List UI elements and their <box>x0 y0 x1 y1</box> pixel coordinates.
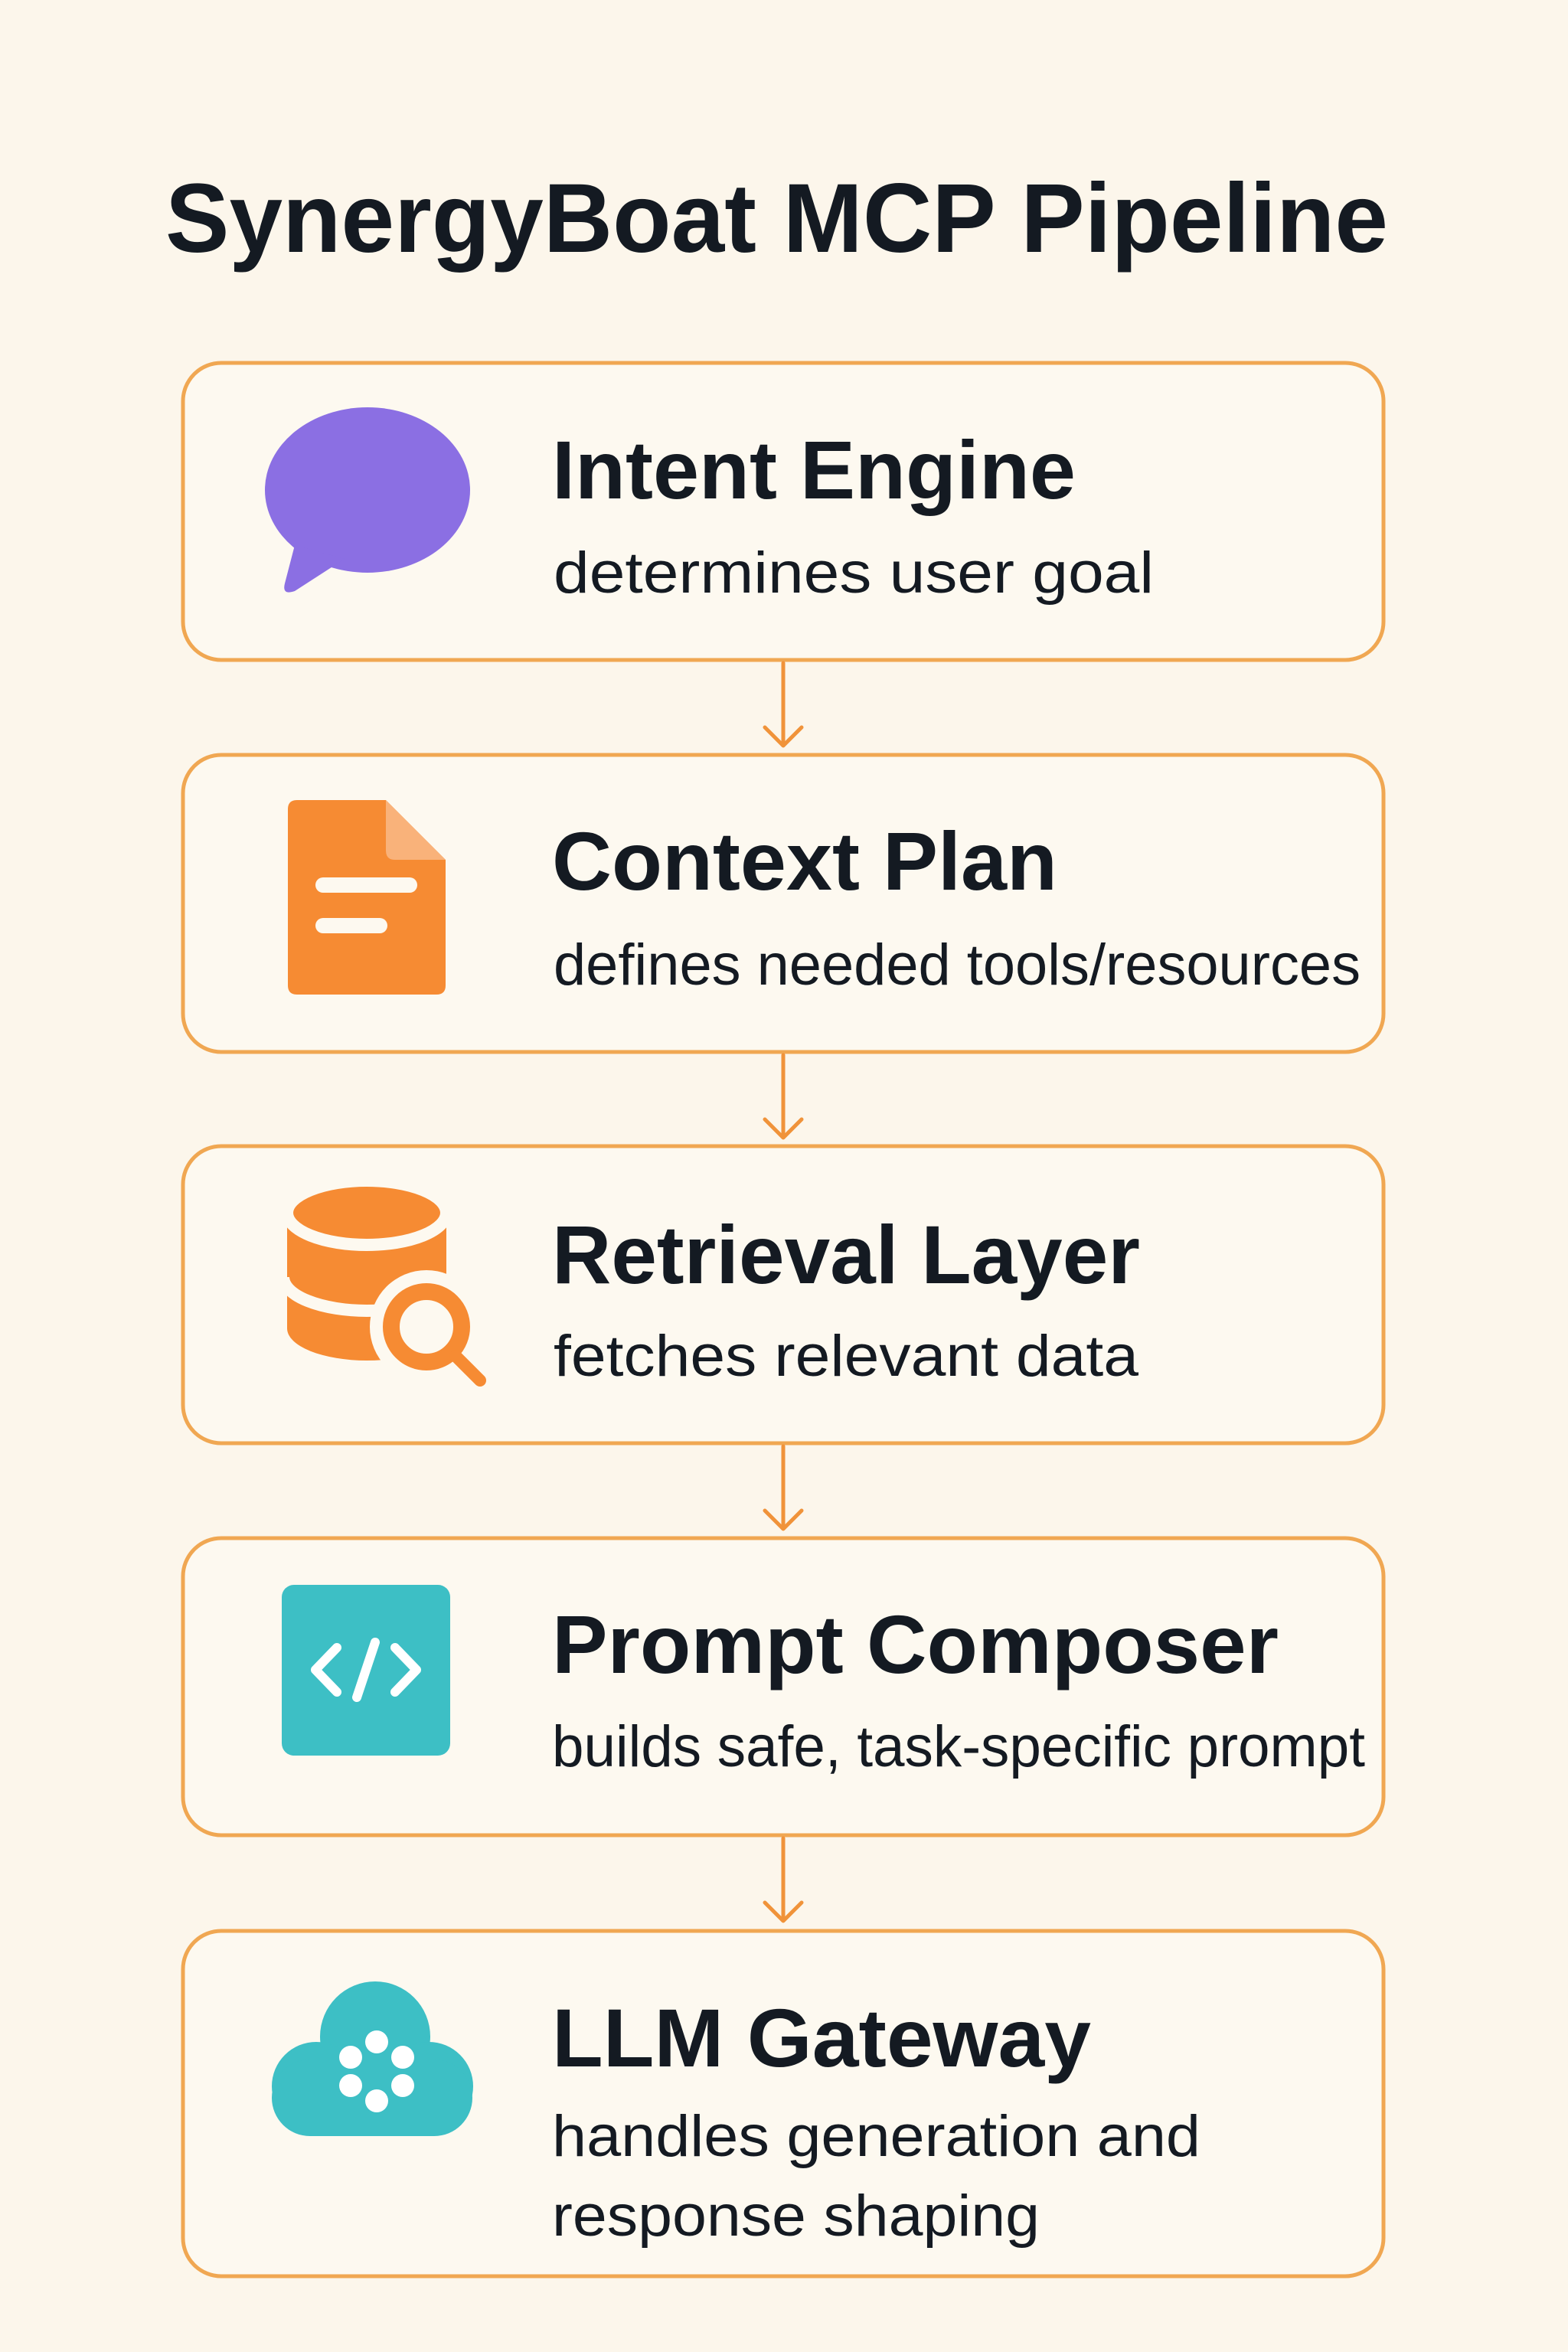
icon: speech bubble <box>265 407 470 593</box>
panel: intent engine <box>183 363 1383 660</box>
heading: Prompt Composer: Prompt Composer <box>552 1598 1279 1690</box>
text: determines user goal: determines user goal <box>554 541 1154 606</box>
text: defines needed tools/resources: defines needed tools/resources <box>554 933 1361 998</box>
heading: Retrieval Layer: Retrieval Layer <box>552 1208 1140 1301</box>
title: SynergyBoat MCP Pipeline <box>165 164 1388 273</box>
panel: context plan <box>183 755 1383 1052</box>
icon: document <box>288 800 446 995</box>
panel: retrieval layer <box>183 1146 1383 1443</box>
text: handles generation and response shaping: handles generation and <box>552 2104 1200 2169</box>
arrow 4 <box>765 1838 802 1921</box>
heading: LLM Gateway: LLM Gateway <box>552 1991 1091 2084</box>
icon: cloud <box>272 1981 473 2136</box>
arrow 2 <box>765 1055 802 1138</box>
text: handles generation and response shaping: response shaping <box>552 2184 1040 2249</box>
icon: code <box>282 1585 450 1756</box>
heading: Intent Engine: Intent Engine <box>552 423 1076 516</box>
text: handles generation and response shaping <box>552 2104 1200 2249</box>
panel: llm gateway <box>183 1931 1383 2276</box>
icon: database search <box>279 1171 483 1383</box>
text: fetches relevant data: fetches relevant data <box>554 1324 1139 1389</box>
panel: prompt composer <box>183 1538 1383 1835</box>
arrow 3 <box>765 1446 802 1529</box>
text: builds safe, task-specific prompt: builds safe, task-specific prompt <box>552 1714 1365 1779</box>
arrow 1 <box>765 663 802 746</box>
heading: Context Plan: Context Plan <box>552 815 1057 907</box>
